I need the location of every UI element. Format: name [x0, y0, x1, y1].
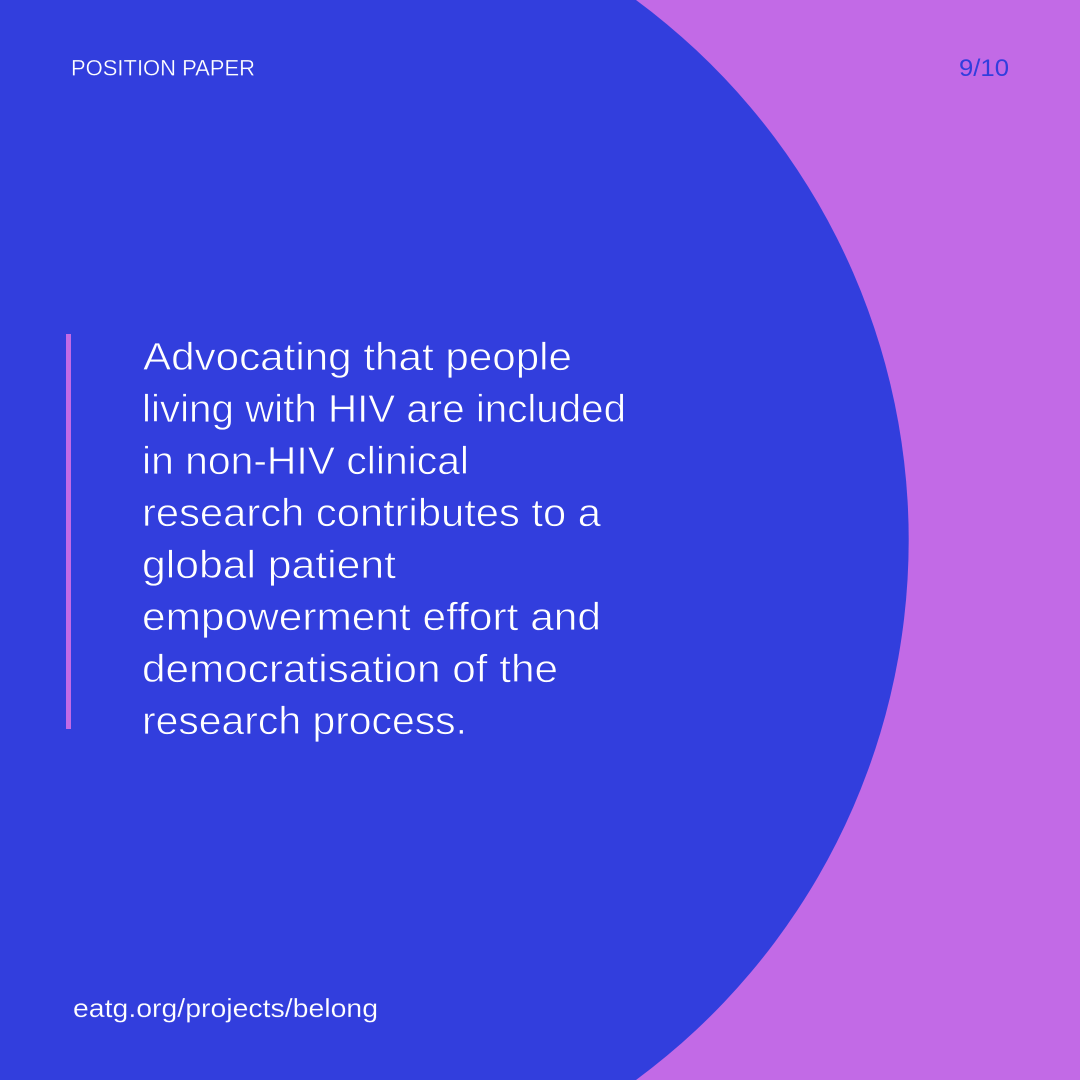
quote text: in non-HIV clinical: [142, 440, 469, 483]
accent bar: [66, 334, 71, 729]
quote text: [142, 336, 626, 743]
quote text: research process.: [142, 700, 467, 743]
header label: POSITION PAPER: [71, 56, 255, 80]
page number: 9/10: [959, 55, 1009, 82]
quote text: global patient: [142, 544, 396, 587]
quote text: research contributes to a: [142, 492, 602, 535]
quote text: democratisation of the: [142, 648, 558, 691]
quote text: Advocating that people: [143, 336, 572, 379]
footer url: eatg.org/projects/belong: [73, 993, 378, 1023]
quote text: empowerment effort and: [142, 596, 601, 639]
quote text: living with HIV are included: [142, 388, 626, 431]
